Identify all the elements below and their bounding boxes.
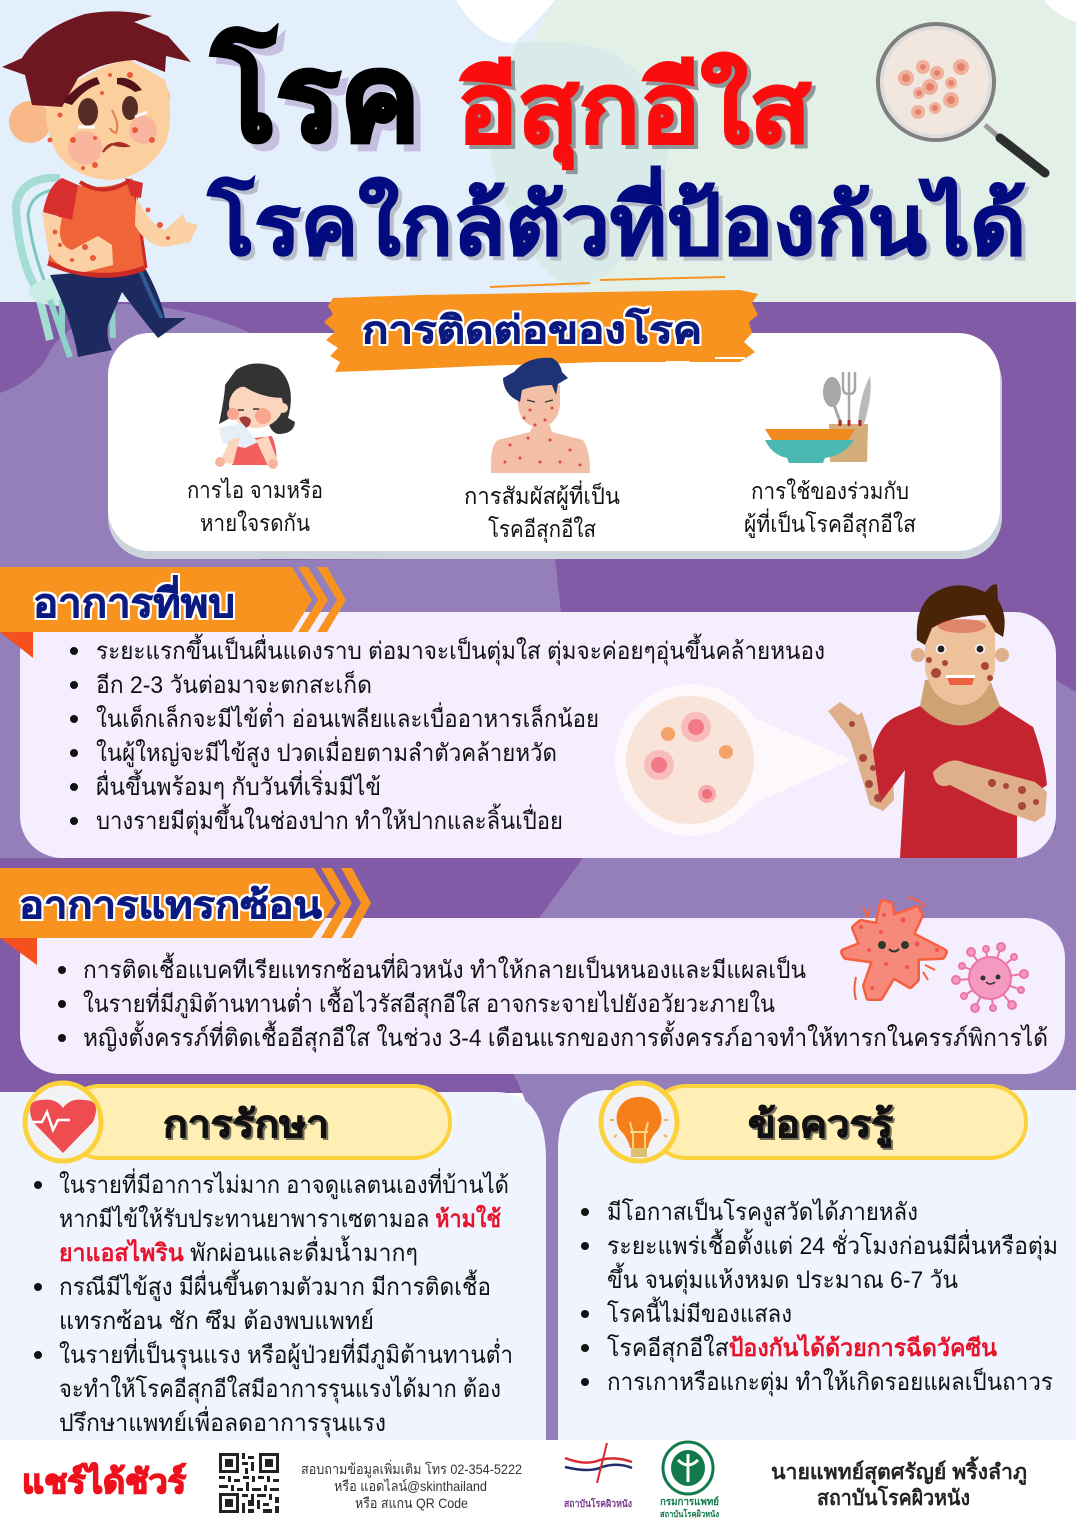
panel: transmission bbox=[108, 277, 1002, 559]
background: header bbox=[0, 0, 1076, 303]
footer: contact text: หรือ แอดไลน์@skinthailand bbox=[334, 1478, 487, 1494]
heading pill: good to know bbox=[650, 1086, 1026, 1158]
logo: institute of dermatology: สถาบันโรคผิวหนัง bbox=[564, 1497, 632, 1510]
bullet list: complications bbox=[58, 952, 1048, 1053]
title line 1: อีสุกอีใส bbox=[457, 53, 811, 170]
footer: share slogan: แชร์ได้ชัวร์ bbox=[22, 1462, 186, 1500]
bullet list: complications: หญิงตั้งครรภ์ที่ติดเชื้ออีสุกอีใส ในช่วง 3-4 เดือนแรกของการตั้งครรภ์อาจทำให้ทารกในครรภ์พิการได้ bbox=[83, 1020, 1048, 1053]
text: cough bbox=[187, 477, 323, 536]
footer: contact text: สอบถามข้อมูลเพิ่มเติม โทร 02-354-5222 bbox=[301, 1460, 522, 1478]
icon: man with rash bbox=[491, 358, 590, 473]
icon: bacteria bbox=[844, 898, 944, 1000]
text: contact: การสัมผัสผู้ที่เป็น bbox=[464, 480, 620, 510]
bullet list: treatment bbox=[34, 1168, 513, 1438]
text: cough: การไอ จามหรือ bbox=[187, 477, 323, 503]
panel: complications bbox=[0, 868, 1065, 1074]
bullet list: good to know: มีโอกาสเป็นโรคงูสวัดได้ภายหลัง bbox=[607, 1197, 918, 1227]
bullet list: symptoms: ระยะแรกขึ้นเป็นผื่นแดงราบ ต่อมาจะเป็นตุ่มใส ตุ่มจะค่อยๆอุ่นขึ้นคล้ายหนอง bbox=[96, 633, 825, 666]
bullet list: treatment: ในรายที่มีอาการไม่มาก อาจดูแลตนเองที่บ้านได้ bbox=[59, 1168, 509, 1200]
bullet list: good to know: ระยะแพร่เชื้อตั้งแต่ 24 ชั่วโมงก่อนมีผื่นหรือตุ่ม bbox=[607, 1228, 1058, 1261]
bullet list: treatment: แทรกซ้อน ชัก ซึม ต้องพบแพทย์ bbox=[59, 1307, 374, 1335]
banner: symptoms heading bbox=[0, 567, 346, 658]
text: sharing bbox=[744, 478, 916, 538]
bullet list: good to know: การเกาหรือแกะตุ่ม ทำให้เกิดรอยแผลเป็นถาวร bbox=[607, 1367, 1053, 1397]
logo: department of medical services: สถาบันโรคผิวหนัง bbox=[660, 1508, 719, 1519]
bullet list: complications: ในรายที่มีภูมิต้านทานต่ำ เชื้อไวรัสอีสุกอีใส อาจกระจายไปยังอวัยวะภายใน bbox=[83, 986, 775, 1019]
bullet list: treatment: กรณีมีไข้สูง มีผื่นขึ้นตามตัวมาก มีการติดเชื้อ bbox=[59, 1269, 491, 1302]
logo: department of medical services bbox=[660, 1442, 719, 1519]
icon: shared utensils bbox=[765, 372, 871, 463]
panel: symptoms bbox=[0, 567, 1056, 858]
bullet list: symptoms: ในผู้ใหญ่จะมีไข้สูง ปวดเมื่อยตามลำตัวคล้ายหวัด bbox=[96, 736, 557, 768]
text: sharing: การใช้ของร่วมกับ bbox=[751, 478, 909, 504]
logo: institute of dermatology bbox=[564, 1443, 632, 1510]
bullet list: treatment: หากมีไข้ให้รับประทานยาพาราเซตามอล ห้ามใช้ bbox=[59, 1204, 501, 1233]
bullet list: good to know: โรคนี้ไม่มีของแสลง bbox=[607, 1296, 792, 1328]
bullet list: good to know: ขึ้น จนตุ่มแห้งหมด ประมาณ 6-7 วัน bbox=[607, 1262, 958, 1295]
bullet list: symptoms: บางรายมีตุ่มขึ้นในช่องปาก ทำให้ปากและลิ้นเปื่อย bbox=[96, 803, 563, 836]
bullet list: treatment: ในรายที่เป็นรุนแรง หรือผู้ป่วยที่มีภูมิต้านทานต่ำ bbox=[59, 1338, 513, 1370]
footer: author credit: นายแพทย์สุตศรัญย์ พริ้งลำภู bbox=[771, 1456, 1027, 1486]
title line 1: โรค bbox=[211, 27, 420, 166]
text: sharing: ผู้ที่เป็นโรคอีสุกอีใส bbox=[744, 508, 916, 538]
bullet list: good to know bbox=[581, 1197, 1058, 1397]
icon: virus bbox=[952, 943, 1028, 1012]
QR code bbox=[219, 1453, 279, 1513]
illustration: boy with rash bbox=[828, 584, 1047, 858]
logo: department of medical services: กรมการแพทย์ bbox=[660, 1496, 719, 1508]
title line 2: โรคใกล้ตัวที่ป้องกันได้ bbox=[207, 166, 1026, 272]
banner: complications heading bbox=[0, 868, 371, 965]
bullet list: good to know: โรคอีสุกอีใสป้องกันได้ด้วยการฉีดวัคซีน bbox=[607, 1333, 998, 1363]
footer: author credit bbox=[771, 1456, 1027, 1510]
panel: good to know bbox=[558, 1083, 1076, 1440]
footer: contact text bbox=[301, 1460, 522, 1511]
banner: symptoms heading: อาการที่พบ bbox=[33, 575, 235, 626]
icon: light bulb bbox=[601, 1083, 677, 1161]
bullet list: treatment: จะทำให้โรคอีสุกอีใสมีอาการรุนแรงได้มาก ต้อง bbox=[59, 1375, 501, 1404]
bullet list: complications: การติดเชื้อแบคทีเรียแทรกซ้อนที่ผิวหนัง ทำให้กลายเป็นหนองและมีแผลเป็น bbox=[83, 952, 806, 984]
banner: transmission heading: การติดต่อของโรค bbox=[362, 307, 702, 352]
bullet list: treatment: ปรึกษาแพทย์เพื่อลดอาการรุนแรง bbox=[59, 1406, 386, 1438]
bullet list: symptoms: ในเด็กเล็กจะมีไข้ต่ำ อ่อนเพลียและเบื่ออาหารเล็กน้อย bbox=[96, 702, 599, 733]
icon: magnifying glass bbox=[878, 24, 1045, 173]
bullet list: treatment: ยาแอสไพริน พักผ่อนและดื่มน้ำมากๆ bbox=[59, 1235, 418, 1267]
illustration: sick boy on chair bbox=[2, 11, 198, 357]
illustration: skin close-up bbox=[615, 684, 852, 836]
bullet list: symptoms: อีก 2-3 วันต่อมาจะตกสะเก็ด bbox=[96, 670, 372, 699]
heading pill: treatment bbox=[64, 1086, 450, 1158]
bullet list: symptoms: ผื่นขึ้นพร้อมๆ กับวันที่เริ่มมีไข้ bbox=[96, 769, 381, 801]
heading pill: treatment: การรักษา bbox=[163, 1104, 329, 1146]
banner: transmission heading bbox=[324, 277, 758, 372]
text: cough: หายใจรดกัน bbox=[200, 510, 310, 536]
text: contact: โรคอีสุกอีใส bbox=[488, 516, 596, 543]
text: contact bbox=[464, 480, 620, 543]
footer: author credit: สถาบันโรคผิวหนัง bbox=[817, 1485, 970, 1510]
background: purple body bbox=[0, 302, 1076, 1440]
banner: complications heading: อาการแทรกซ้อน bbox=[19, 885, 322, 927]
icon: girl coughing bbox=[215, 363, 295, 469]
heading pill: good to know: ข้อควรรู้ bbox=[748, 1104, 894, 1148]
bullet list: symptoms bbox=[70, 633, 825, 836]
title line 1 bbox=[211, 27, 811, 170]
icon: heart bbox=[25, 1083, 101, 1161]
panel: treatment bbox=[0, 1083, 546, 1440]
footer: contact text: หรือ สแกน QR Code bbox=[355, 1495, 468, 1511]
footer bbox=[0, 1441, 1076, 1522]
